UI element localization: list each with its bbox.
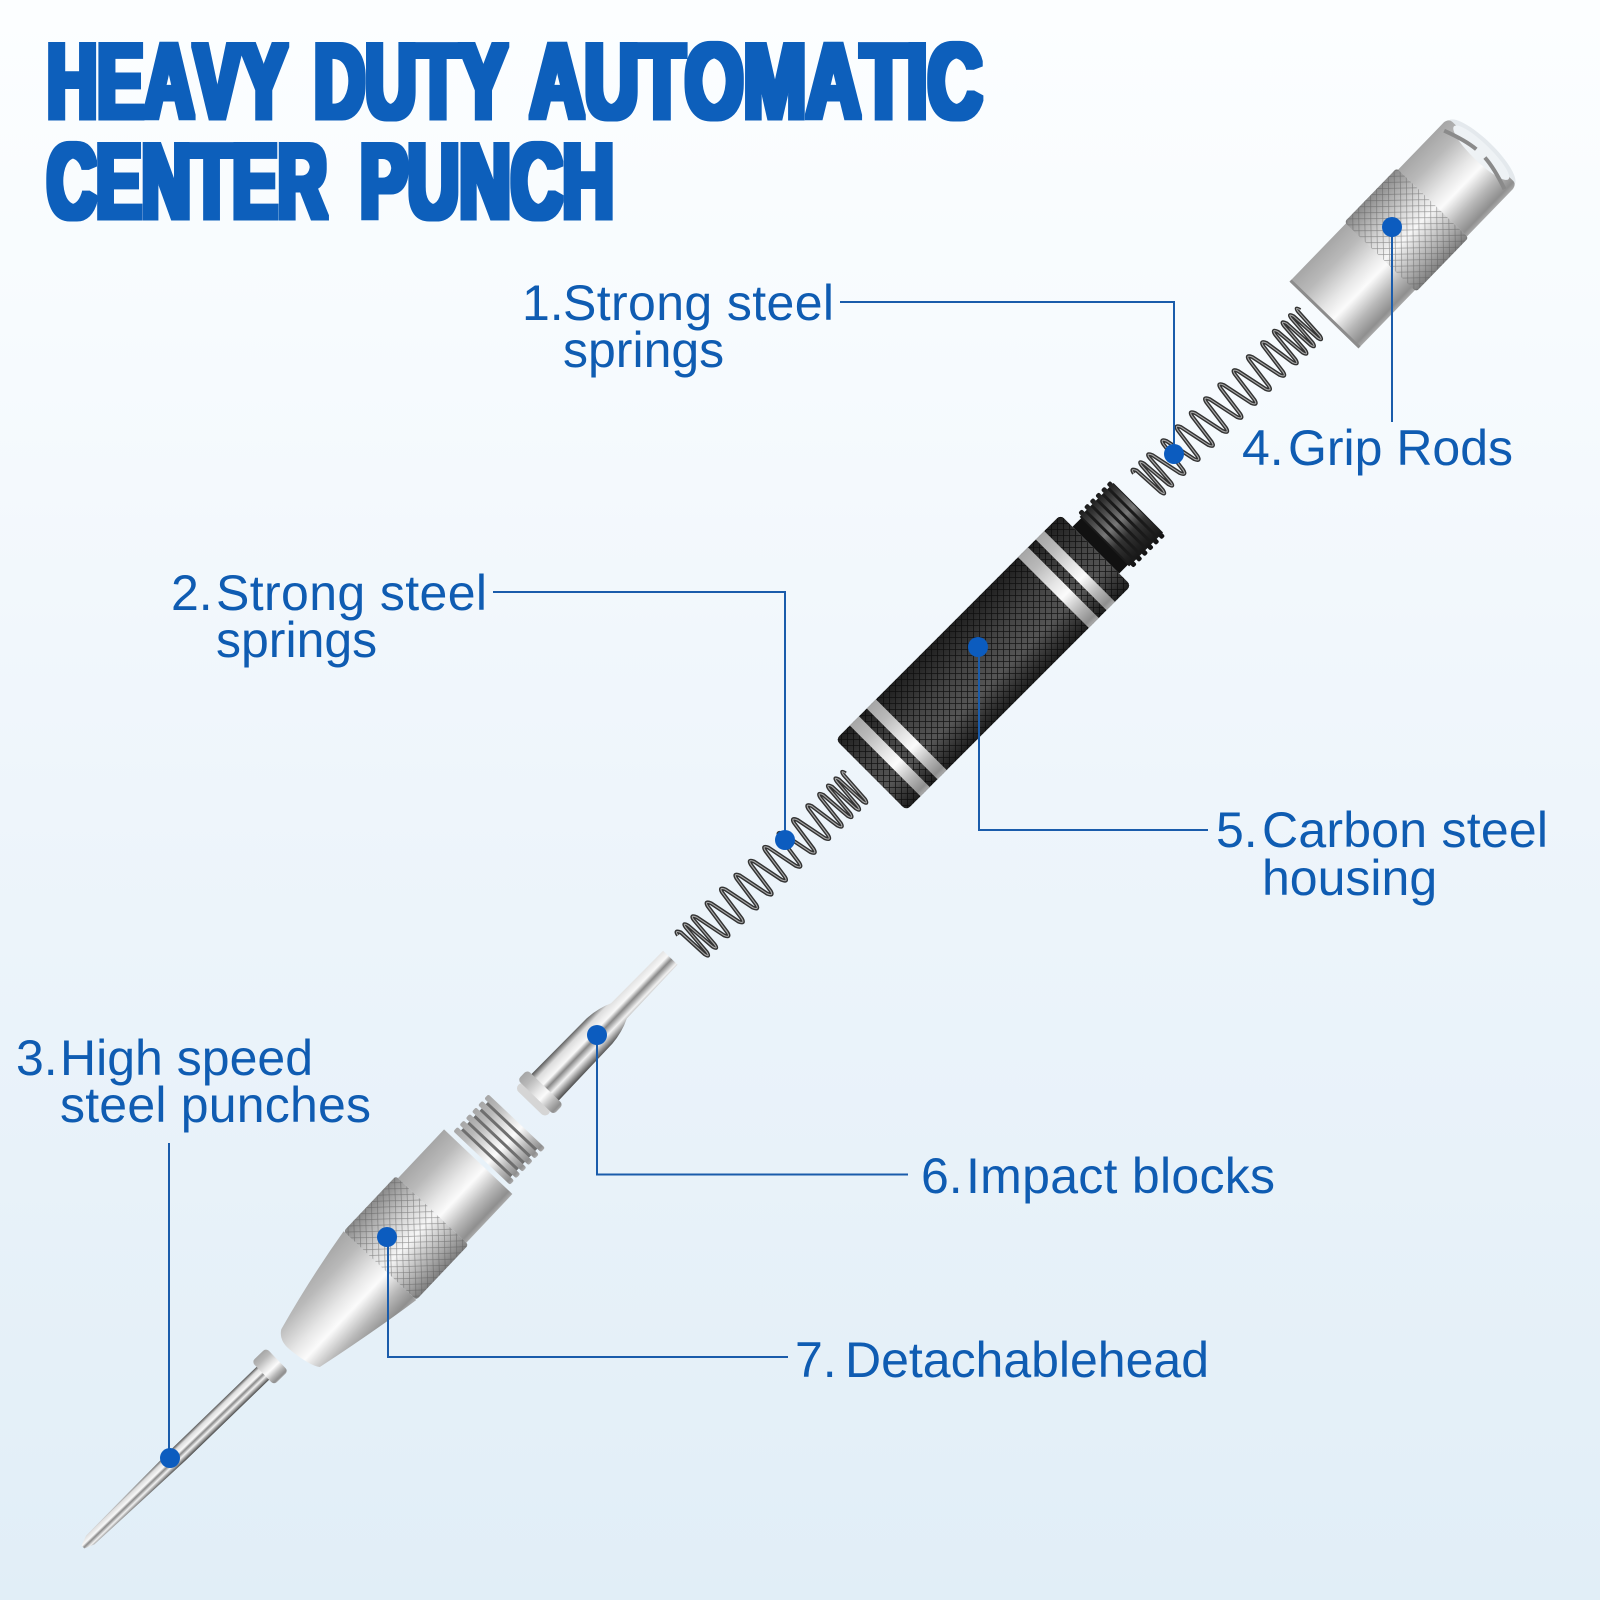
callout 7: detachable head: 7. bbox=[795, 1332, 837, 1388]
callout 3: high speed steel punches: steel punches bbox=[60, 1077, 371, 1133]
callout 1: strong steel springs: Strong steel bbox=[563, 275, 834, 331]
callout 2: strong steel springs bbox=[171, 565, 795, 850]
title: CENTER bbox=[47, 121, 327, 241]
callout 1: strong steel springs: springs bbox=[563, 322, 724, 378]
part: lower spring bbox=[676, 771, 870, 961]
callout 6: impact blocks bbox=[587, 1025, 1275, 1204]
title: PUNCH bbox=[360, 121, 614, 241]
callout 6: impact blocks: 6. bbox=[921, 1148, 963, 1204]
title: AUTOMATIC bbox=[530, 21, 982, 141]
part: black carbon steel housing bbox=[836, 472, 1174, 810]
callout 1: strong steel springs bbox=[522, 275, 1184, 464]
part: silver detachable head bbox=[259, 1087, 553, 1389]
callout 6: impact blocks: Impact blocks bbox=[966, 1148, 1275, 1204]
callout 5: carbon steel housing: Carbon steel bbox=[1262, 802, 1548, 858]
callout 3: high speed steel punches: High speed bbox=[60, 1030, 313, 1086]
callout 7: detachable head bbox=[377, 1227, 1209, 1388]
callout 2: strong steel springs: 2. bbox=[171, 565, 213, 621]
callout 2: strong steel springs: Strong steel bbox=[216, 565, 487, 621]
part: impact block striker bbox=[512, 940, 688, 1120]
part: grip rod end cap bbox=[1288, 109, 1526, 350]
callout 3: high speed steel punches bbox=[16, 1030, 371, 1468]
title bbox=[47, 21, 982, 241]
part: upper spring bbox=[1131, 308, 1325, 499]
callout 2: strong steel springs: springs bbox=[216, 612, 377, 668]
callout 4: grip rods bbox=[1242, 217, 1513, 476]
callout 3: high speed steel punches: 3. bbox=[16, 1030, 58, 1086]
callout 5: carbon steel housing: housing bbox=[1262, 850, 1437, 906]
title: HEAVY bbox=[47, 21, 287, 141]
callout 1: strong steel springs: 1. bbox=[522, 275, 564, 331]
callout 7: detachable head: Detachablehead bbox=[845, 1332, 1209, 1388]
title: DUTY bbox=[314, 21, 507, 141]
callout 5: carbon steel housing bbox=[968, 637, 1548, 906]
part: high speed steel punch pin bbox=[72, 1348, 288, 1559]
callout 4: grip rods: 4. bbox=[1242, 420, 1284, 476]
callout 5: carbon steel housing: 5. bbox=[1216, 802, 1258, 858]
callout 4: grip rods: Grip Rods bbox=[1288, 420, 1513, 476]
